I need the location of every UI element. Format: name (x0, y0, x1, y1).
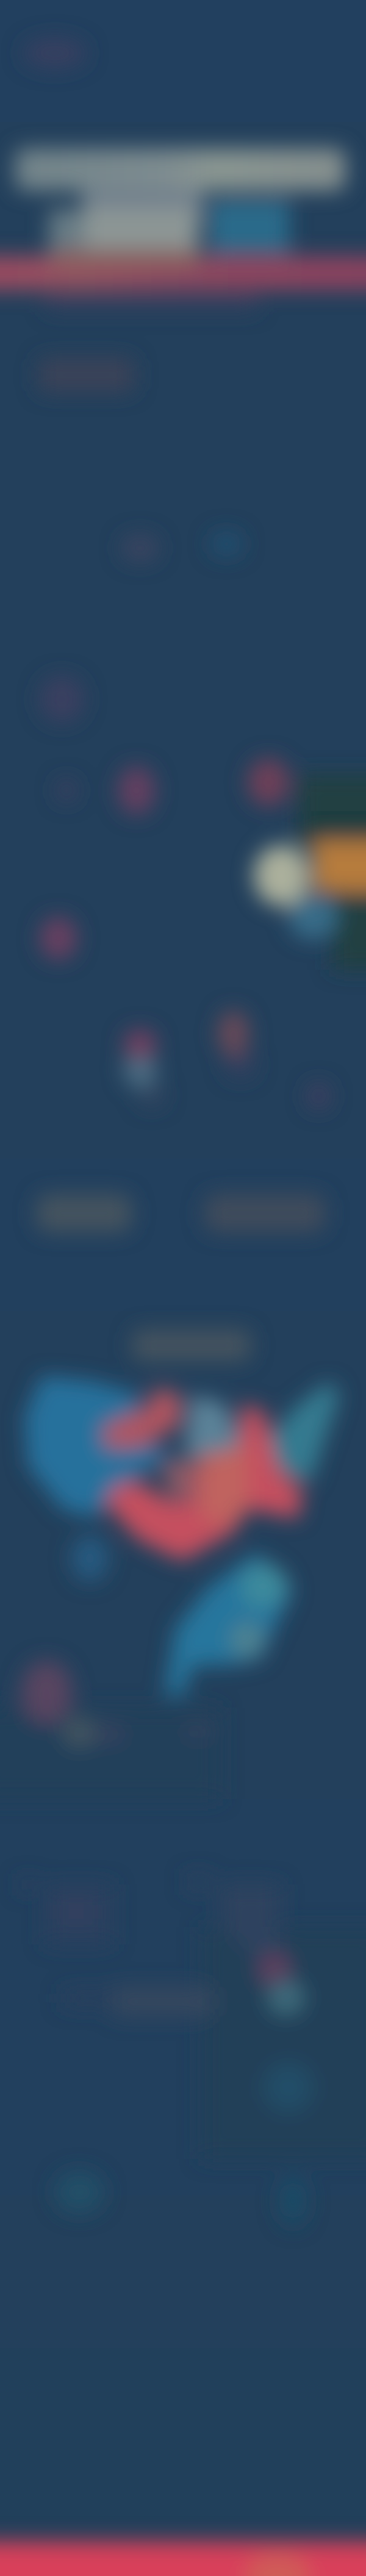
caption left (36, 1194, 132, 1232)
map heading (132, 1329, 251, 1361)
icon: right faint shape (187, 1875, 280, 1955)
soft lower-left background patch (0, 1708, 220, 1799)
map: east blue region (266, 1381, 340, 1482)
red dot markers (118, 758, 290, 815)
icon: left faint box (20, 1879, 112, 1944)
lower left note (63, 1717, 214, 1747)
map: central blue region (184, 1395, 240, 1461)
intro heading (38, 358, 134, 392)
dark green panel at right (299, 775, 366, 970)
header: red ribbon (0, 249, 366, 310)
footer band (0, 2541, 366, 2576)
map: central red region (105, 1403, 304, 1561)
stacked marker group (123, 1029, 165, 1107)
teal dot (264, 2063, 313, 2112)
highlighted circle group (40, 840, 366, 960)
red dot left (40, 917, 77, 960)
map: southern blue region (165, 1553, 293, 1695)
small marks row (40, 532, 243, 801)
map: small island (71, 1535, 109, 1581)
caption centre (63, 1987, 215, 2017)
small marker pair (259, 1953, 304, 2014)
map (24, 1376, 340, 1695)
map: west blue region (24, 1376, 173, 1517)
soft lower-right background patch (201, 1927, 366, 2159)
caption right (204, 1194, 326, 1232)
header: small logo (23, 38, 87, 68)
map: upper red region (102, 1387, 181, 1448)
teal mark right (279, 2175, 307, 2226)
header: title block (15, 148, 345, 256)
pin marker group (218, 1011, 330, 1109)
lower left badge (21, 1661, 73, 1723)
teal mark left (55, 2171, 104, 2213)
